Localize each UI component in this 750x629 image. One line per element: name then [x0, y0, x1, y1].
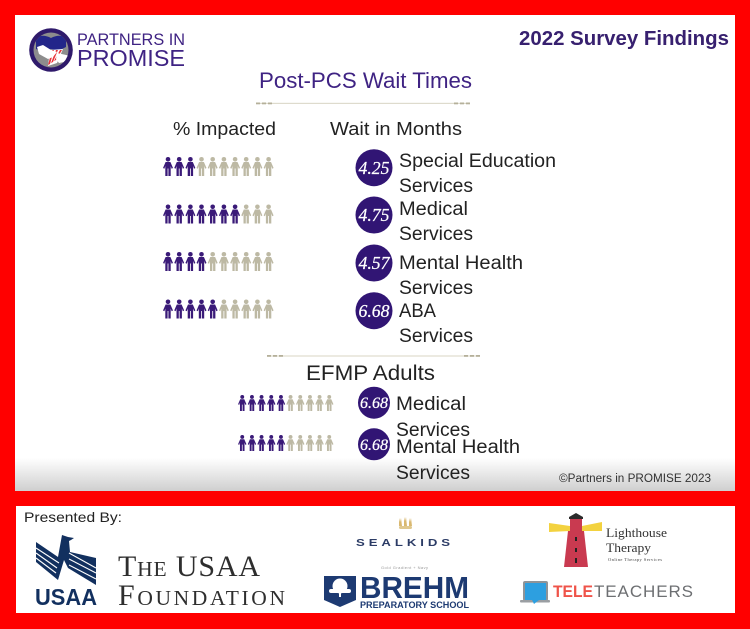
logo: Lighthouse Therapy: Therapy: [606, 540, 652, 555]
column heading: % Impacted: % Impacted: [173, 118, 276, 139]
logo: Partners in Promise: PROMISE: [77, 45, 185, 71]
pictogram: EFMP medical 5 of 10: [238, 395, 333, 411]
logo: Lighthouse Therapy: Online Therapy Services: [608, 557, 662, 562]
logo: USAA: USAA: [35, 584, 97, 610]
label: Mental Health Services: Mental Health: [399, 253, 523, 274]
label: EFMP Mental Health Services: Mental Health: [396, 437, 520, 458]
badge: 4.57 months: 4.57: [358, 253, 390, 273]
logo: Brehm Preparatory School: BREHM: [360, 570, 469, 605]
label: EFMP Mental Health Services: Services: [396, 463, 470, 484]
label: Special Education Services: Services: [399, 176, 473, 197]
logo: TeleTeachers: [520, 581, 693, 604]
logo text: The USAA Foundation: FOUNDATION: [118, 579, 285, 612]
heading: 2022 Survey Findings: 2022 Survey Findings: [519, 28, 729, 50]
badge: EFMP mental health 6.68: [358, 428, 390, 460]
label: Special Education Services: Special Education: [399, 151, 556, 172]
label: Medical Services: [399, 199, 473, 245]
logo: TeleTeachers: TEACHERS: [594, 582, 693, 601]
panel: sponsors: [16, 506, 735, 613]
badge: 4.25 months: [356, 149, 392, 186]
pictogram: mental health 4 of 10: [163, 252, 274, 271]
logo: Lighthouse Therapy: Lighthouse: [606, 525, 667, 540]
label: EFMP Medical Services: Services: [396, 420, 470, 441]
pictogram: medical 7 of 10: [163, 204, 274, 224]
badge: 6.68 months: 6.68: [358, 301, 390, 321]
badge: 4.25 months: 4.25: [358, 158, 390, 178]
heading: EFMP Adults: EFMP Adults: [306, 361, 435, 385]
logo text: The USAA Foundation: [118, 550, 285, 612]
logo: Brehm Preparatory School: PREPARATORY SCHOOL: [360, 600, 469, 611]
text: Presented By: Presented By:: [24, 509, 122, 525]
note: Gold Gradient + Navy: Gold Gradient + Navy: [381, 565, 428, 570]
badge: EFMP mental health 6.68: 6.68: [360, 437, 388, 454]
label: Special Education Services: [399, 151, 556, 197]
label: Mental Health Services: Services: [399, 278, 473, 299]
logo: Partners in Promise: PARTNERS IN: [77, 31, 185, 49]
badge: 4.75 months: 4.75: [358, 205, 390, 225]
logo: Partners in Promise: [29, 28, 185, 72]
panel: survey findings: [15, 15, 735, 491]
label: ABA Services: Services: [399, 326, 473, 347]
badge: 6.68 months: [356, 292, 392, 329]
label: ABA Services: ABA: [399, 301, 436, 322]
label: ABA Services: [399, 301, 473, 347]
badge: 4.75 months: [356, 196, 392, 234]
logo: Lighthouse Therapy: [549, 513, 667, 567]
label: EFMP Medical Services: [396, 394, 470, 441]
badge: 4.57 months: [356, 244, 392, 282]
title: Post-PCS Wait Times: Post-PCS Wait Times: [259, 68, 472, 93]
pictogram: EFMP mental health 5 of 10: [238, 435, 333, 451]
label: Medical Services: Medical: [399, 199, 468, 220]
badge: EFMP medical 6.68: 6.68: [360, 395, 388, 412]
copyright note: ©Partners in PROMISE 2023: [559, 473, 711, 485]
label: EFMP Mental Health Services: [396, 437, 520, 484]
pictogram: ABA 5 of 10: [163, 300, 274, 318]
pictogram: special education 3 of 10: [163, 157, 274, 176]
logo: SEALKIDS: [356, 517, 454, 549]
logo: SEALKIDS: SEALKIDS: [356, 538, 454, 549]
label: Mental Health Services: [399, 253, 523, 299]
column heading: Wait in Months: Wait in Months: [330, 118, 462, 139]
logo: USAA: [35, 535, 97, 610]
label: EFMP Medical Services: Medical: [396, 394, 466, 415]
logo text: The USAA Foundation: THE USAA: [118, 550, 260, 583]
logo: TeleTeachers: TELE: [553, 582, 593, 601]
label: Medical Services: Services: [399, 224, 473, 245]
logo: Brehm Preparatory School: [324, 570, 469, 611]
badge: EFMP medical 6.68: [358, 387, 390, 419]
